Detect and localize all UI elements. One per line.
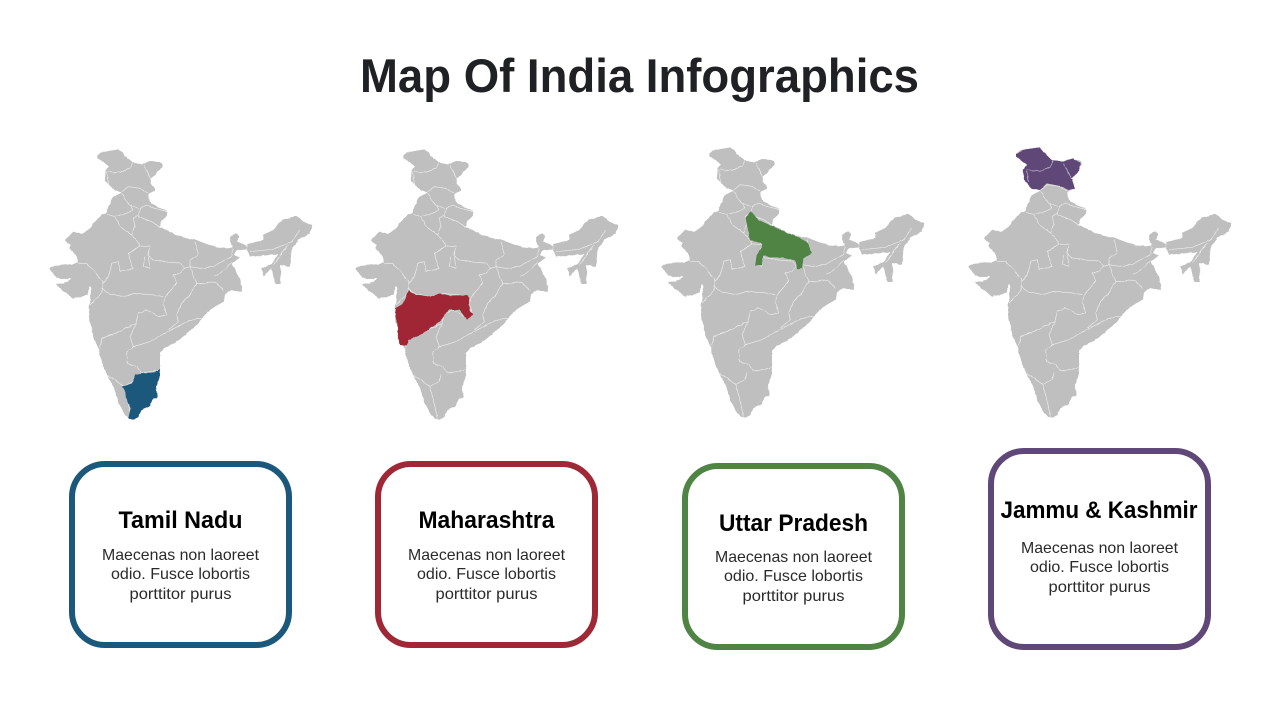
body text: odio. Fusce lobortis — [1030, 559, 1169, 576]
body text — [715, 549, 873, 605]
map: Jammu & Kashmir highlighted — [968, 147, 1231, 417]
card: Uttar Pradesh — [685, 466, 902, 647]
map: Maharashtra highlighted — [355, 149, 618, 419]
highlighted state: Uttar Pradesh — [746, 211, 812, 269]
heading: Maharashtra: Maharashtra — [418, 507, 555, 534]
body text: Maecenas non laoreet — [1021, 540, 1179, 557]
highlighted state: Tamil Nadu — [122, 369, 161, 419]
body text: porttitor purus — [1048, 579, 1150, 596]
card: Jammu & Kashmir — [991, 451, 1208, 647]
body text — [408, 547, 566, 603]
heading: Jammu & Kashmir: Jammu & Kashmir — [1000, 497, 1198, 524]
map: Uttar Pradesh highlighted — [661, 147, 924, 417]
body text: odio. Fusce lobortis — [417, 566, 556, 583]
body text: porttitor purus — [742, 588, 844, 605]
body text: Maecenas non laoreet — [715, 549, 873, 566]
map: Tamil Nadu highlighted — [49, 149, 312, 419]
card: Maharashtra — [378, 464, 595, 645]
highlighted state: Jammu & Kashmir — [1016, 147, 1081, 190]
body text: Maecenas non laoreet — [408, 547, 566, 564]
heading: Uttar Pradesh: Uttar Pradesh — [719, 510, 868, 537]
highlighted state: Maharashtra — [395, 291, 473, 346]
body text — [102, 547, 260, 603]
body text: porttitor purus — [436, 586, 538, 603]
body text: odio. Fusce lobortis — [724, 568, 863, 585]
card: Tamil Nadu — [72, 464, 289, 645]
heading: Tamil Nadu: Tamil Nadu — [118, 507, 242, 534]
body text: Maecenas non laoreet — [102, 547, 260, 564]
body text: porttitor purus — [130, 586, 232, 603]
title: Map Of India Infographics — [360, 49, 919, 102]
body text: odio. Fusce lobortis — [111, 566, 250, 583]
body text — [1021, 540, 1179, 596]
